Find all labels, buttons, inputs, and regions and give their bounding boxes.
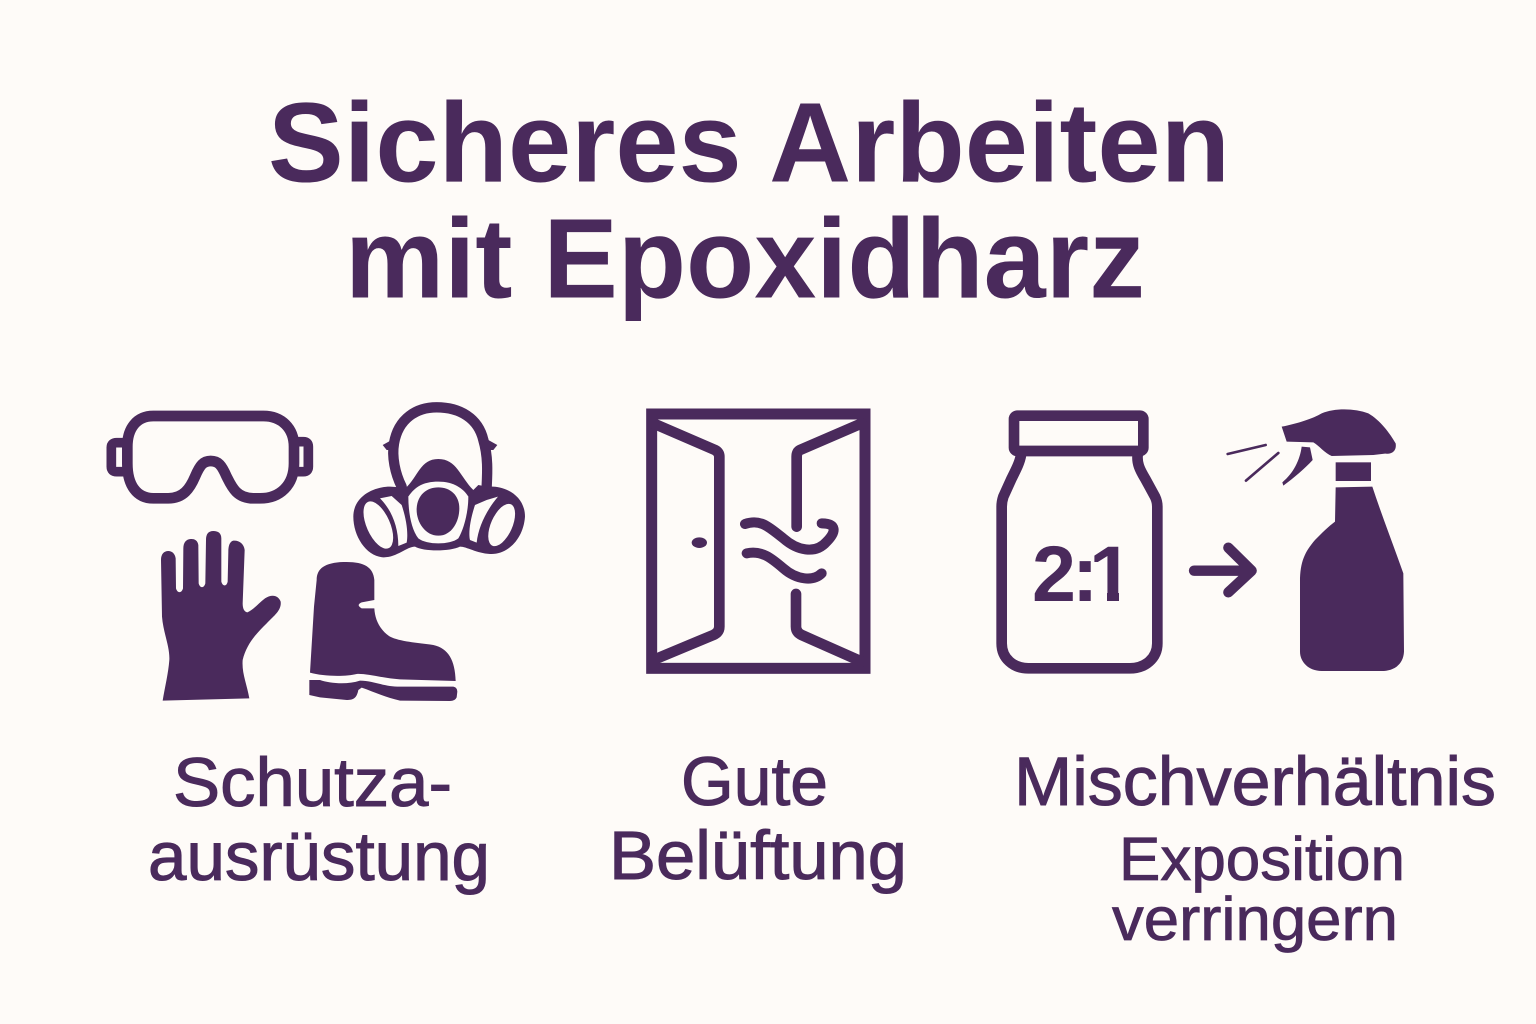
label: Schutzausrüstung [148, 744, 490, 895]
panel: Schutzausrüstung icons [111, 407, 525, 701]
icon: glove [161, 531, 281, 701]
panel: mixing ratio icons [1002, 409, 1404, 671]
label: Schutzausrüstung: ausrüstung [148, 818, 490, 895]
jar ratio text: 2 [1032, 529, 1076, 618]
label: Gute Belüftung: Gute [681, 743, 828, 820]
title: mit Epoxidharz [345, 196, 1145, 322]
icon: jar [1002, 416, 1157, 668]
door frame [652, 414, 865, 668]
airflow lines [745, 522, 834, 579]
right door leaf [796, 423, 862, 662]
arrow [1194, 548, 1252, 592]
label: Schutzausrüstung: Schutza- [173, 744, 452, 821]
title: Sicheres Arbeiten [268, 80, 1230, 206]
label: Exposition verringern [1112, 825, 1405, 953]
label: Mischverhältnis: Mischverhältnis [1014, 743, 1496, 820]
label: Gute Belüftung: Belüftung [609, 817, 907, 894]
label: Exposition verringern: Exposition [1119, 825, 1405, 893]
icon: safety goggles [111, 416, 308, 498]
icon: open door with airflow [652, 414, 865, 668]
icon: safety boot [309, 562, 457, 701]
door knob [692, 537, 707, 548]
jar ratio text [1034, 546, 1119, 601]
icon: respirator mask [353, 407, 525, 557]
jar ratio text: 1 [1089, 529, 1133, 618]
label: Gute Belüftung [609, 743, 907, 894]
title [268, 80, 1230, 322]
left door leaf [653, 423, 719, 660]
infographic canvas [106, 100, 1494, 953]
label: Exposition verringern: verringern [1112, 885, 1398, 953]
jar ratio text: : [1072, 529, 1098, 618]
icon: spray bottle [1228, 409, 1404, 671]
